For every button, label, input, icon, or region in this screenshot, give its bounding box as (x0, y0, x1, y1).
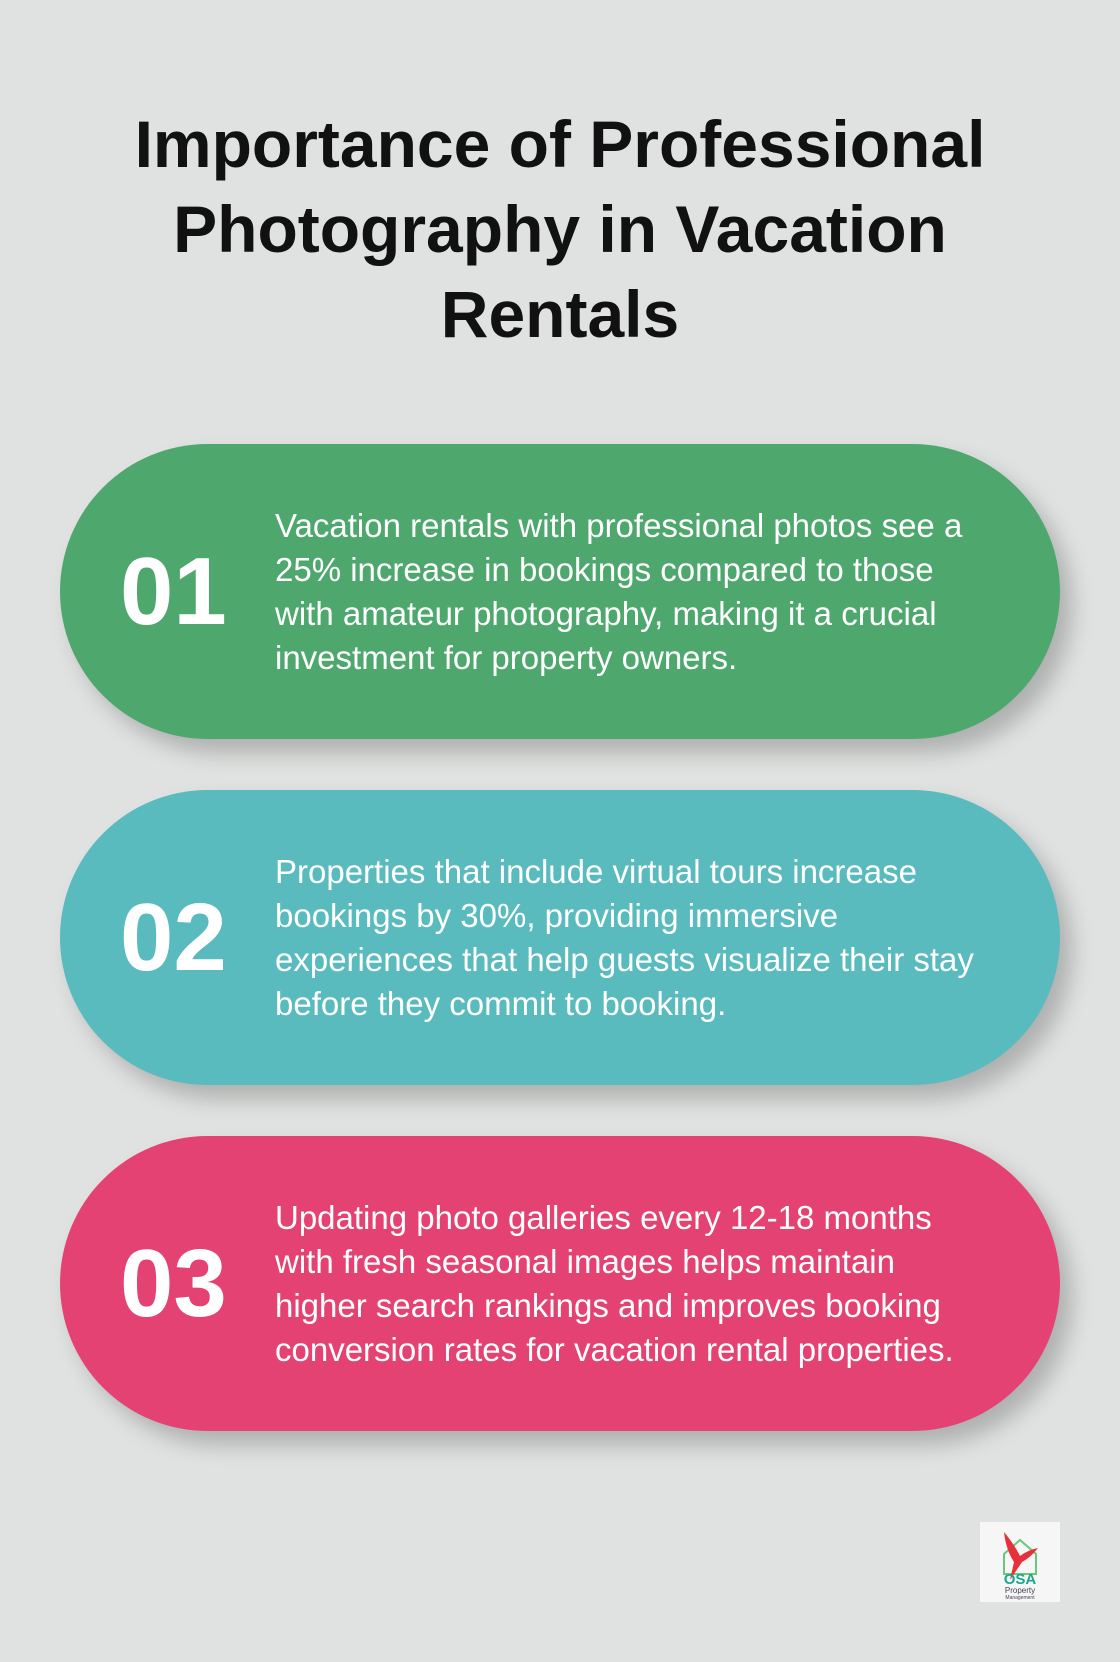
text 01: 25% increase in bookings compared to those (275, 550, 934, 588)
text 01: with amateur photography, making it a crucial (275, 594, 937, 632)
panel: card 03 (60, 1136, 1060, 1431)
text 03: higher search rankings and improves booking (275, 1286, 941, 1324)
title: Photography in Vacation (173, 192, 947, 266)
text 01: Vacation rentals with professional photos see a (275, 506, 962, 544)
text 02: experiences that help guests visualize their stay (275, 940, 974, 978)
title (135, 107, 985, 351)
title: Importance of Professional (135, 107, 985, 181)
text 01 (275, 506, 962, 676)
text 02: Properties that include virtual tours increase (275, 852, 917, 890)
text 02 (275, 852, 974, 1022)
panel: card 01 (60, 444, 1060, 739)
text 01: investment for property owners. (275, 638, 737, 676)
text 03: conversion rates for vacation rental properties. (275, 1330, 954, 1368)
number 03: 03 (120, 1230, 227, 1337)
title: Rentals (441, 277, 679, 351)
number 01: 01 (120, 538, 227, 645)
panel: card 02 (60, 790, 1060, 1085)
text 02: bookings by 30%, providing immersive (275, 896, 838, 934)
number 02: 02 (120, 884, 227, 991)
text 03: with fresh seasonal images helps maintain (275, 1242, 895, 1280)
text 03: Updating photo galleries every 12-18 months (275, 1198, 932, 1236)
logo (980, 1522, 1060, 1602)
logo: Management (1005, 1595, 1035, 1601)
text 03 (275, 1198, 954, 1368)
logo: OSA (1004, 1571, 1036, 1588)
text 02: before they commit to booking. (275, 984, 726, 1022)
logo: Property (1005, 1586, 1035, 1595)
